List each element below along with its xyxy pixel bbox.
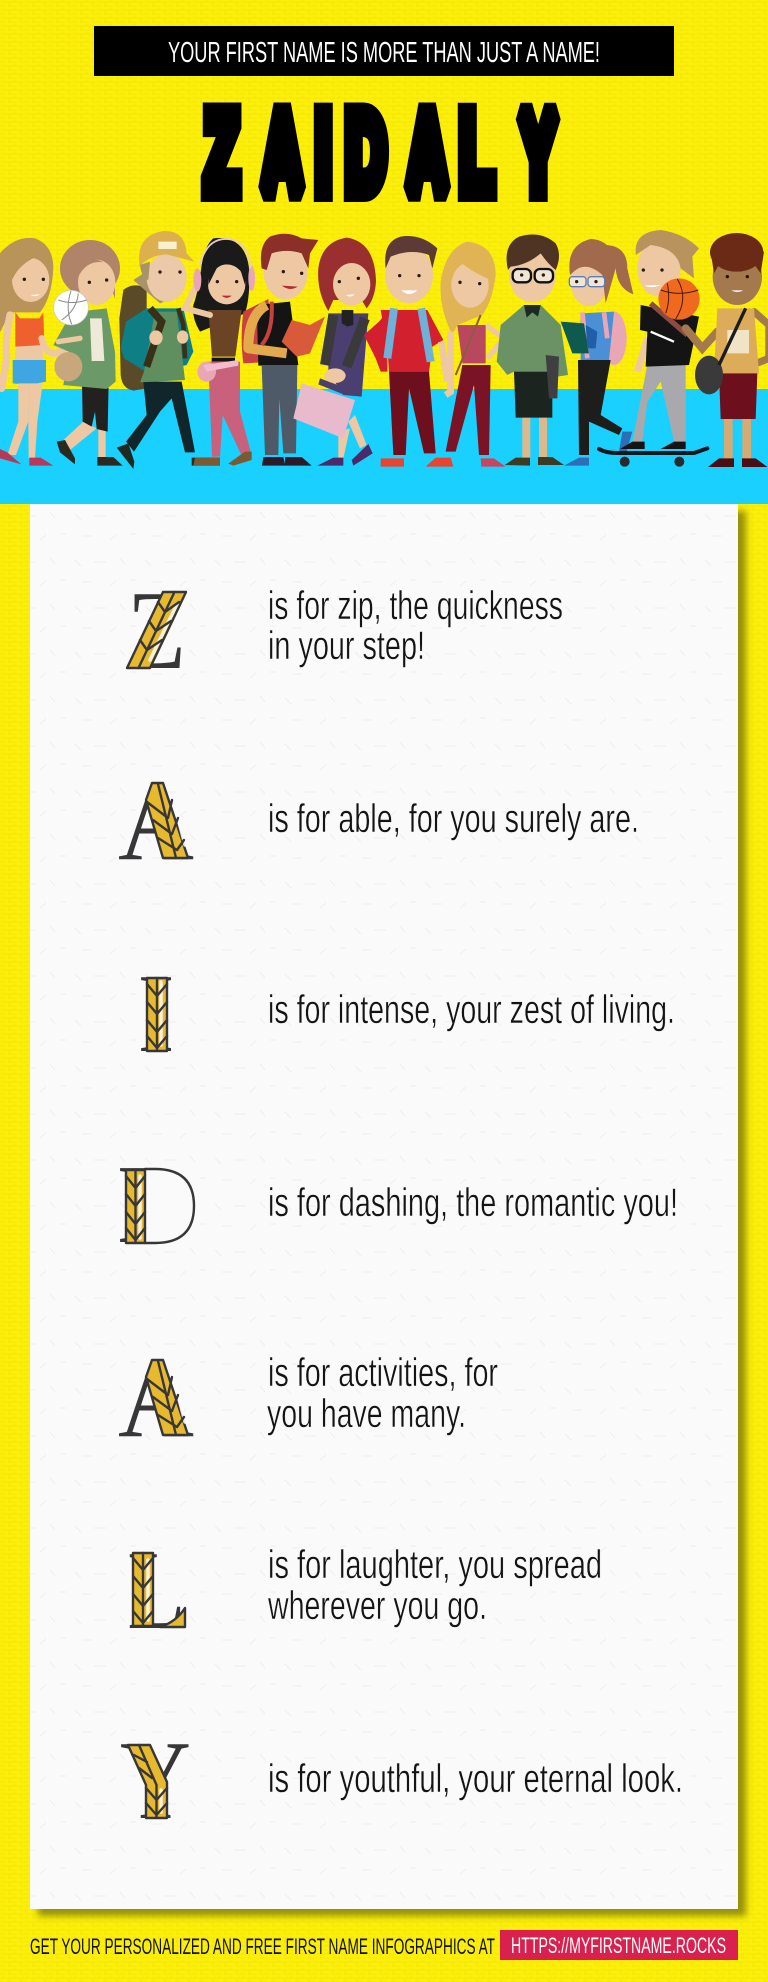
footer call to action: GET YOUR PERSONALIZED AND FREE FIRST NAME INFOGRAPHICS AT (30, 1934, 495, 1959)
character: girl in green jacket (53, 240, 123, 466)
letter A: A (118, 760, 194, 884)
character: boy with tank top and bag (695, 233, 768, 467)
text: Z line (268, 584, 563, 668)
character: hiker with cap and backpack (117, 231, 220, 469)
row: D (117, 1143, 678, 1267)
character: girl with ponytail and tablet (561, 239, 633, 466)
text: A second lines: is for activities, for (268, 1351, 498, 1395)
character: skateboarder with basketball (599, 230, 717, 467)
text: Z line: in your step! (268, 624, 425, 668)
text: L lines: wherever you go. (267, 1584, 487, 1628)
character: boy with red book (242, 234, 325, 466)
letter L: L (127, 1529, 186, 1653)
row: A second (118, 1337, 498, 1461)
character: girl with headphones (185, 238, 255, 466)
title: name: ZAIDALY (204, 90, 557, 215)
left six characters (0, 231, 376, 469)
letter Y: Y (120, 1719, 191, 1843)
illustration: group of young people (0, 230, 768, 469)
character: boy with glasses (497, 234, 568, 466)
text: A second lines: you have many. (267, 1392, 466, 1436)
text: Z line: is for zip, the quickness (268, 584, 563, 628)
row: L (127, 1529, 602, 1653)
letter I: I (137, 952, 175, 1076)
letter Z: Z (127, 569, 186, 693)
character: blonde girl (440, 242, 506, 467)
blue ground band (0, 389, 768, 504)
text: A second lines (267, 1351, 498, 1436)
header banner (94, 26, 674, 76)
letter A second: A (118, 1337, 194, 1461)
row: I (137, 952, 675, 1076)
main white panel (30, 504, 738, 1909)
right six characters (364, 230, 768, 467)
row: Z (127, 569, 563, 693)
row: Y (120, 1719, 683, 1843)
character: boy in red shirt (364, 236, 453, 467)
text: L lines (267, 1543, 602, 1628)
row: A (118, 760, 639, 884)
character: girl with volleyball (0, 238, 78, 466)
text: L lines: is for laughter, you spread (268, 1543, 602, 1587)
letter D: D (117, 1143, 194, 1267)
character: girl with pink bag (293, 238, 376, 466)
